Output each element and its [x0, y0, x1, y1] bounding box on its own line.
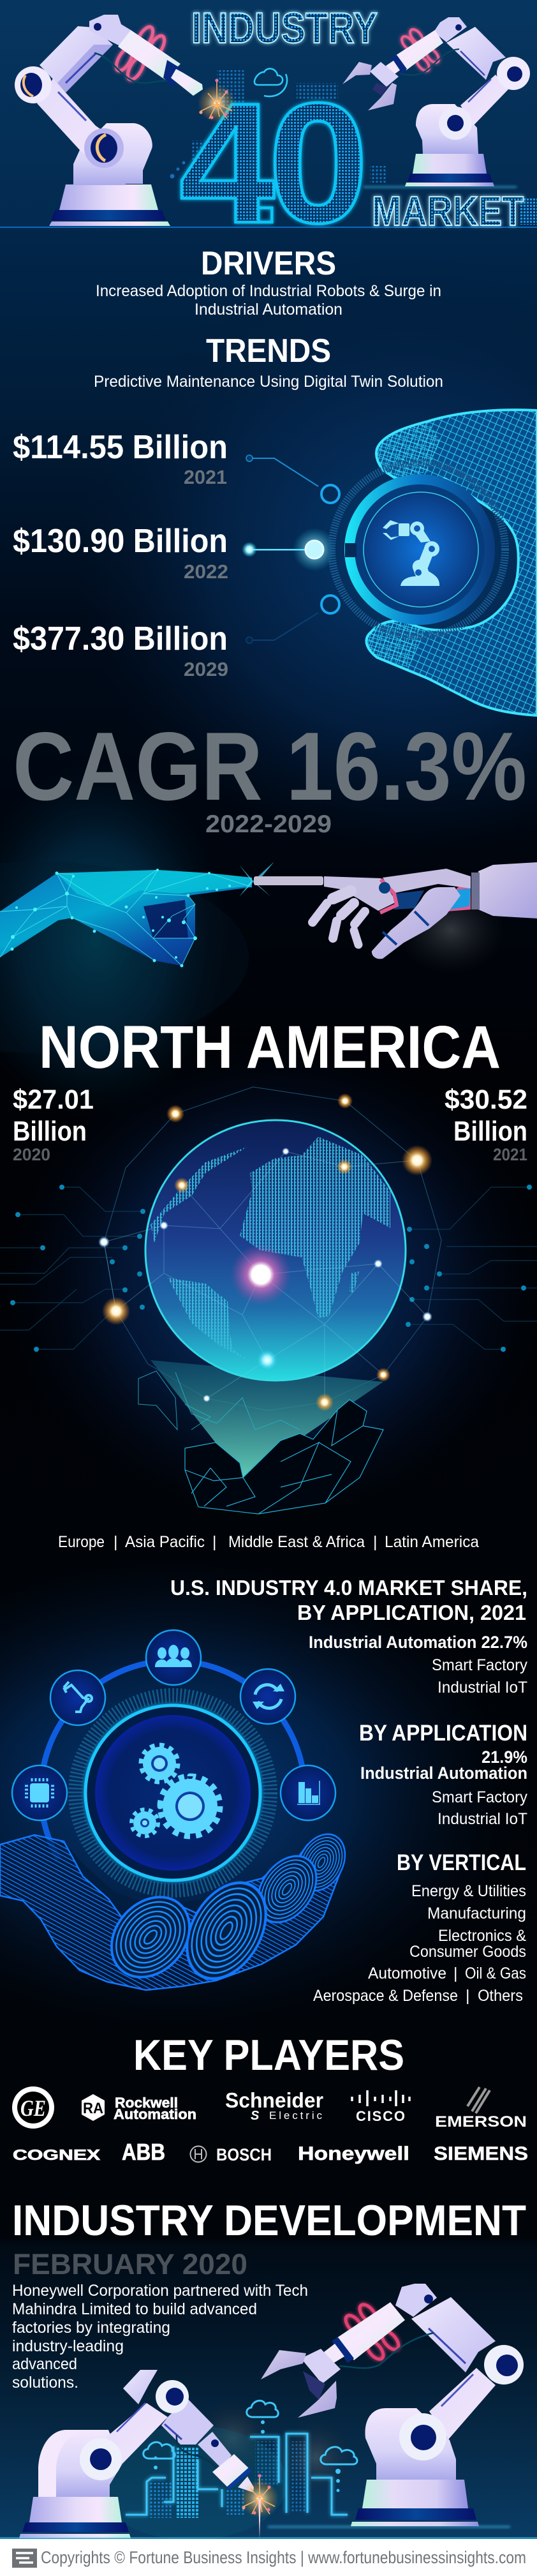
gripper — [370, 62, 399, 87]
value 2020 — [13, 1084, 94, 1164]
logo: Emerson: EMERSON — [435, 2113, 527, 2130]
elbow joint — [497, 57, 530, 90]
value 2029: $377.30 Billion — [13, 620, 228, 657]
logo: Cisco — [352, 2090, 409, 2124]
logo: Schneider Electric — [225, 2088, 323, 2123]
base joint — [439, 107, 472, 140]
soft glows — [96, 2400, 354, 2540]
value 2020: Billion — [13, 1116, 87, 1147]
outer arc ring — [0, 1612, 353, 1973]
region list: Latin America — [385, 1533, 479, 1551]
connector lines and nodes — [242, 455, 339, 643]
region list: Asia Pacific — [125, 1533, 205, 1551]
plate and pedestal — [19, 2534, 131, 2538]
touch sparkle — [239, 862, 274, 897]
share list 1 — [309, 1633, 527, 1696]
core disc — [85, 1705, 260, 1880]
CAGR period: 2022-2029 — [205, 811, 332, 838]
value 2021: $114.55 Billion — [13, 429, 228, 466]
cloud link dots — [154, 2420, 341, 2492]
share list 2: Industrial IoT — [438, 1810, 527, 1828]
CAGR figure — [13, 712, 527, 838]
dotted strip behind Market — [520, 198, 537, 225]
heading: U.S. market share — [170, 1576, 527, 1624]
value 2029 — [13, 620, 228, 680]
section: North America — [13, 1014, 527, 1164]
logo: Bosch: BOSCH — [216, 2145, 272, 2164]
share list 1: Smart Factory — [432, 1656, 527, 1674]
development description: solutions. — [12, 2374, 78, 2392]
section: market size figures — [13, 429, 228, 680]
text: drivers description: Increased Adoption of Industrial Robots & Surge in — [96, 282, 441, 300]
development description: Mahindra Limited to build advanced — [12, 2300, 257, 2318]
cable — [400, 49, 459, 75]
circuit traces — [0, 1187, 537, 1349]
development description: factories by integrating — [12, 2319, 170, 2337]
share list 2: 21.9% — [482, 1748, 527, 1767]
share list 1: Industrial Automation 22.7% — [309, 1633, 527, 1652]
icon circle: bar chart — [281, 1765, 335, 1820]
pink coil rings — [342, 2302, 402, 2362]
share list 2: Smart Factory — [432, 1788, 527, 1806]
upper box — [40, 26, 113, 93]
forearm cylinder — [337, 2302, 405, 2360]
logo: Bosch — [190, 2145, 272, 2164]
vertical list: Manufacturing — [427, 1905, 526, 1922]
cable — [177, 2435, 220, 2471]
wrist cap — [395, 2284, 437, 2317]
text: drivers description — [96, 282, 441, 318]
circuit hand fingers — [96, 1826, 355, 1993]
logo: GE: GE — [20, 2095, 46, 2121]
cable — [94, 53, 172, 83]
section: industry development — [12, 2196, 526, 2392]
lower arm — [37, 79, 121, 167]
development description: Honeywell Corporation partnered with Tech — [12, 2282, 308, 2300]
tick ring — [75, 1695, 270, 1891]
logo: Cognex: COGNEX — [13, 2146, 101, 2163]
vertical list: | — [466, 1987, 469, 2005]
big 4.0 numeral: . — [252, 135, 279, 243]
base joint — [80, 2438, 122, 2480]
region list: | — [212, 1533, 217, 1551]
wrist collar — [471, 872, 480, 910]
logo: Schneider Electric: S — [251, 2109, 260, 2123]
share list 2 — [360, 1748, 527, 1828]
text: drivers description: Industrial Automation — [195, 301, 342, 318]
main arm — [429, 2368, 496, 2439]
vertical list: Others — [478, 1987, 523, 2005]
value 2020: $27.01 — [13, 1084, 94, 1115]
heading: Key Players: KEY PLAYERS — [133, 2031, 404, 2079]
forearm — [478, 862, 537, 918]
illustration: globe in low-poly hand — [0, 1087, 537, 1514]
main arm — [107, 2403, 168, 2464]
elbow joint — [15, 66, 52, 103]
heading: U.S. market share: U.S. INDUSTRY 4.0 MARKET SHARE, — [170, 1576, 527, 1599]
data blocks — [149, 2441, 306, 2518]
base joint — [399, 2413, 446, 2460]
icon: cloud — [254, 69, 287, 96]
spark — [198, 79, 236, 123]
region list: Middle East & Africa — [228, 1533, 365, 1551]
share list 2: Industrial Automation — [360, 1764, 527, 1783]
development description: advanced — [12, 2355, 77, 2373]
region list: | — [373, 1533, 378, 1551]
illustration: wireframe hand turning robot dial — [242, 410, 537, 715]
dial — [332, 463, 505, 636]
vertical list: Consumer Goods — [409, 1943, 526, 1961]
glowing floor line — [364, 186, 517, 188]
globe — [145, 1120, 406, 1381]
value 2021 — [445, 1084, 527, 1164]
wrist cap — [434, 17, 467, 42]
upper gear — [141, 1745, 178, 1782]
heading: Drivers: DRIVERS — [201, 245, 336, 282]
logo: Rockwell Automation — [82, 2094, 196, 2122]
logo: Siemens: SIEMENS — [434, 2143, 528, 2164]
illustration: gears held in circuit hand — [0, 1612, 355, 1993]
large gear — [160, 1776, 220, 1836]
body — [416, 104, 478, 154]
light cone — [151, 1360, 383, 1478]
icon circle: chip — [12, 1765, 67, 1820]
spark and flare — [240, 2474, 279, 2539]
glowing floor line — [268, 2526, 510, 2527]
icon: Fortune Business Insights logo — [12, 2549, 37, 2568]
digital mesh hand — [0, 869, 252, 968]
gripper — [301, 2349, 341, 2384]
icon circle: people — [146, 1630, 201, 1685]
heading: Trends: TRENDS — [206, 333, 331, 370]
plate and pedestal — [351, 2522, 479, 2526]
elbow joint — [156, 2380, 189, 2413]
clouds — [143, 2400, 357, 2464]
section: key players — [12, 2031, 528, 2165]
logo: Rockwell Automation: Automation — [114, 2106, 196, 2122]
logo: Rockwell Automation: RA — [83, 2100, 103, 2117]
header: Industry 4.0 Market title — [170, 4, 537, 258]
illustration: bottom right gripper robot — [261, 2284, 524, 2527]
heading: U.S. market share: BY APPLICATION, 2021 — [297, 1601, 526, 1624]
vertical list: | — [453, 1965, 458, 1982]
vertical list: Oil & Gas — [465, 1965, 526, 1982]
icon circle: robot arm — [50, 1670, 105, 1725]
logo: GE — [12, 2086, 54, 2129]
pink coil rings — [399, 27, 441, 73]
gears — [131, 1745, 220, 1836]
curled fingers — [313, 891, 365, 945]
region list — [58, 1533, 479, 1551]
wrist housing — [383, 869, 471, 894]
value 2021 — [13, 429, 228, 488]
development description: industry-leading — [12, 2337, 124, 2355]
illustration: left welding robot — [15, 15, 236, 226]
share list 1: Industrial IoT — [438, 1679, 527, 1696]
section: market share by application and vertical — [170, 1576, 527, 2005]
logo: Emerson — [435, 2087, 527, 2130]
body — [73, 123, 152, 185]
low-poly hand — [138, 1371, 383, 1514]
illustration: right gripper robot — [342, 17, 530, 188]
background glows — [0, 227, 537, 2042]
plate and pedestal — [49, 221, 170, 226]
back of hand — [324, 876, 397, 911]
forearm tool — [212, 2454, 249, 2487]
value 2022: $130.90 Billion — [13, 523, 228, 560]
vertical list — [313, 1882, 526, 2005]
development description — [12, 2282, 308, 2392]
logo: Honeywell: Honeywell — [298, 2143, 409, 2164]
logo: Schneider Electric: Schneider — [225, 2088, 323, 2112]
forearm cylinder — [118, 30, 180, 80]
value 2029: 2029 — [184, 658, 228, 680]
region list: | — [114, 1533, 117, 1551]
wrist cap — [89, 15, 131, 46]
wrist — [198, 2432, 232, 2468]
section: drivers and trends — [94, 245, 443, 391]
lower arm — [161, 2398, 214, 2445]
pointing finger — [254, 876, 323, 885]
lower arm — [460, 75, 508, 126]
base joint — [84, 128, 124, 168]
pink coil rings — [113, 24, 168, 82]
illustration: bottom left welding robot — [19, 2370, 279, 2539]
region list: Europe — [58, 1533, 105, 1551]
heading: North America: NORTH AMERICA — [39, 1014, 501, 1081]
decorative circuit dots — [170, 70, 386, 183]
network polygon — [104, 1087, 441, 1411]
elbow joint — [484, 2345, 524, 2385]
rear box — [123, 2370, 158, 2404]
logo: Schneider Electric: Electric — [269, 2109, 323, 2122]
big 4.0 numeral: 4 — [179, 67, 276, 258]
illustration: smart city circuit lines — [96, 2400, 357, 2540]
value 2021: Billion — [453, 1116, 527, 1147]
value 2022 — [13, 523, 228, 583]
date: FEBRUARY 2020 — [13, 2248, 247, 2280]
vertical list: Automotive — [368, 1965, 446, 1982]
value 2022: 2022 — [184, 560, 228, 583]
body — [365, 2408, 456, 2480]
side nodes — [10, 1185, 532, 1352]
icon circle: refresh — [240, 1669, 295, 1724]
icon: robot arm on dial — [383, 520, 439, 586]
internal bars — [394, 890, 424, 910]
big 4.0 numeral — [179, 67, 369, 258]
illustration: digital hand touching robot hand — [0, 862, 537, 968]
vertical list: Energy & Utilities — [411, 1882, 526, 1900]
robot hand — [254, 862, 537, 959]
logo: ABB: ABB — [122, 2139, 165, 2165]
circuit hand palm — [0, 1835, 342, 1990]
big 4.0 numeral: 0 — [268, 67, 369, 258]
title: Industry: INDUSTRY — [191, 4, 378, 52]
value 2020: 2020 — [13, 1145, 50, 1164]
continents — [151, 1137, 390, 1362]
vertical list: Aerospace & Defense — [313, 1987, 458, 2005]
upper box — [446, 27, 506, 80]
logo: Rockwell Automation: Rockwell — [115, 2095, 178, 2111]
value 2021: $30.52 — [445, 1084, 527, 1115]
logo: Cisco: CISCO — [356, 2108, 405, 2124]
body — [38, 2430, 122, 2497]
value 2021: 2021 — [493, 1145, 527, 1164]
dense mesh on fingertips — [367, 421, 440, 667]
wire hand mesh — [367, 410, 537, 715]
text: trends description: Predictive Maintenance Using Digital Twin Solution — [94, 373, 443, 391]
thumb — [372, 887, 460, 959]
cable — [339, 2333, 434, 2368]
vertical list: Electronics & — [438, 1927, 526, 1945]
upper box — [411, 2297, 496, 2372]
globe network lines — [104, 1151, 427, 1402]
forearm cylinder — [395, 30, 443, 70]
glowing nodes — [98, 1093, 432, 1411]
circuit lines — [126, 2434, 348, 2515]
footer bar — [0, 2537, 537, 2576]
plate and pedestal — [405, 183, 494, 186]
small gear — [131, 1809, 158, 1836]
value 2021: 2021 — [184, 466, 227, 488]
